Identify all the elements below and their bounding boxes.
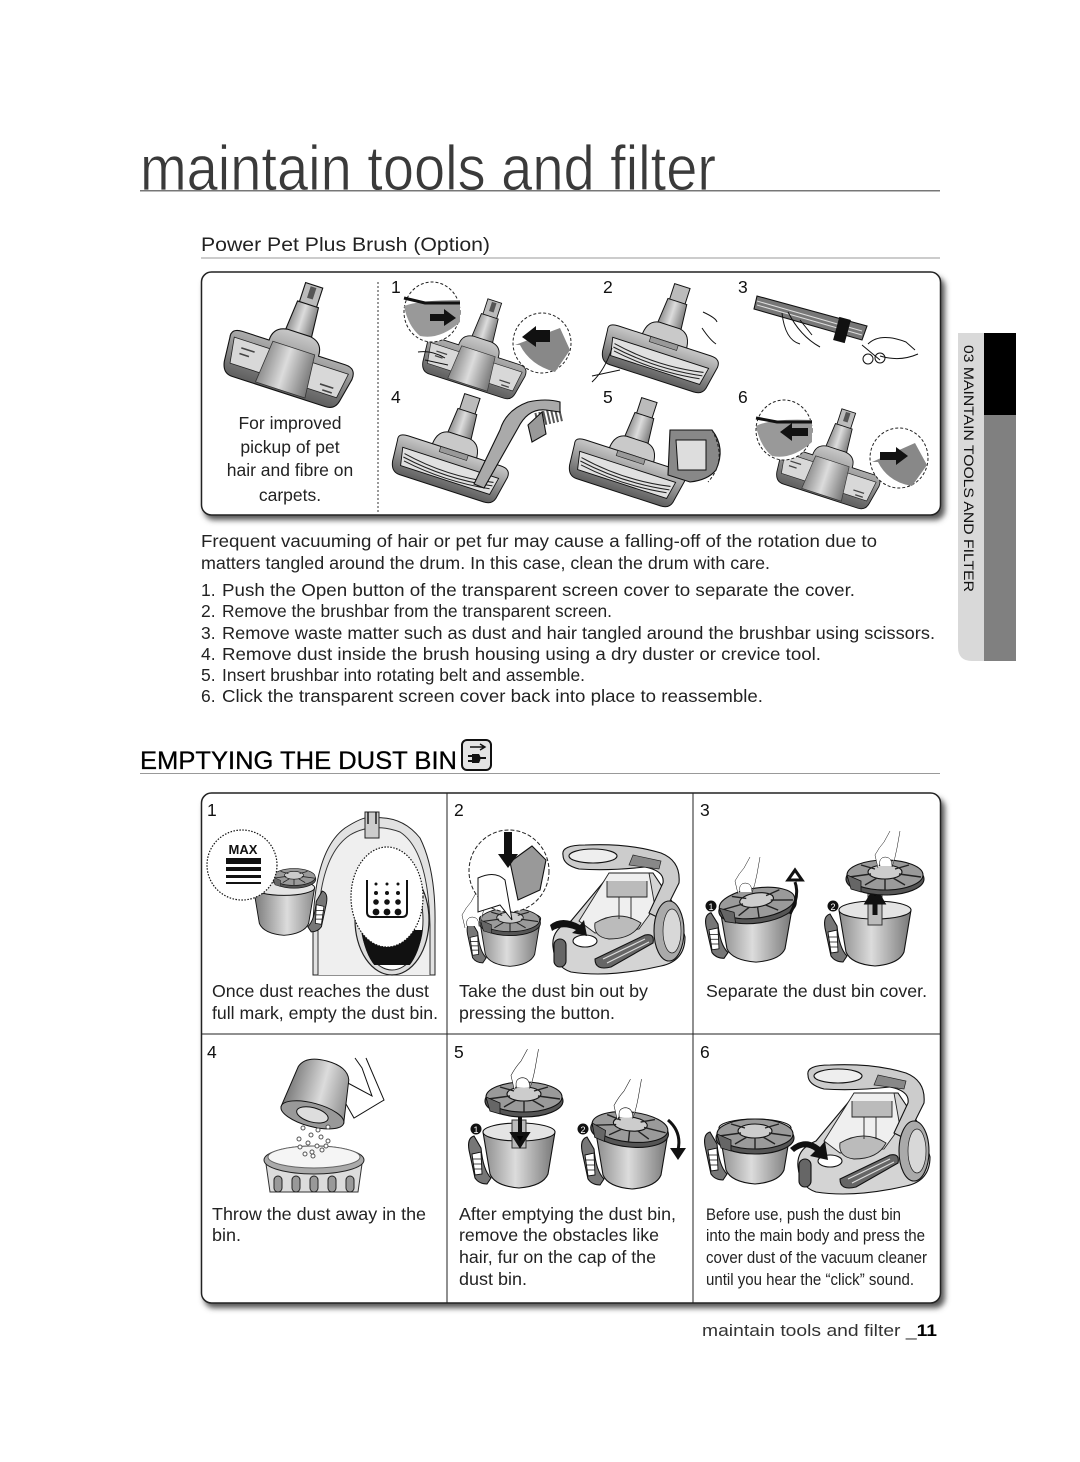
step 1 caption [212, 981, 438, 1023]
step 2: take bin out [454, 800, 685, 974]
panel text: improved pickup: pickup of pet [240, 437, 340, 457]
icon: main brush [218, 265, 376, 412]
step 2 illustration [592, 268, 738, 397]
step 4 caption [212, 1204, 426, 1245]
step 6 caption: until you hear the “click” sound. [706, 1271, 914, 1289]
panel text: improved pickup [227, 413, 353, 505]
step 5: replace cover: 5 [454, 1042, 464, 1062]
numbered instructions: 4. [201, 644, 216, 664]
step 1 illustration: 1 [391, 277, 401, 297]
step 6 caption: into the main body and press the [706, 1227, 925, 1245]
step 2 caption: pressing the button. [459, 1003, 615, 1023]
step 5 caption: hair, fur on the cap of the [459, 1247, 656, 1267]
step 3: separate cover: 3 [700, 800, 710, 820]
numbered instructions: Push the Open button of the transparent screen cover to separate the cover. [222, 580, 855, 600]
numbered instructions: Remove the brushbar from the transparent screen. [222, 601, 612, 621]
step 6 illustration: 6 [738, 387, 748, 407]
step 2: take bin out: 2 [454, 800, 464, 820]
step 5 caption: After emptying the dust bin, [459, 1204, 676, 1224]
step 6 illustration [738, 387, 928, 512]
numbered instructions: 2. [201, 601, 216, 621]
step 4 caption: Throw the dust away in the [212, 1204, 426, 1224]
numbered instructions: 5. [201, 665, 216, 685]
numbered instructions: 3. [201, 623, 216, 643]
step 4 caption: bin. [212, 1225, 241, 1245]
badge: 1 [470, 1124, 482, 1135]
step 5 illustration [564, 382, 720, 511]
step 2 illustration: 2 [603, 277, 613, 297]
heading: power pet plus brush: Power Pet Plus Brush (Option) [201, 235, 490, 256]
badge: 2: 2 [580, 1125, 586, 1135]
step 4 illustration [387, 378, 562, 507]
step 5 illustration: 5 [603, 387, 613, 407]
step 6: reinsert bin [700, 1042, 930, 1194]
badge: 2 [578, 1124, 588, 1135]
step 2 caption: Take the dust bin out by [459, 981, 648, 1001]
step 1: dust full mark: MAX [229, 842, 258, 857]
numbered instructions: Remove waste matter such as dust and hair tangled around the brushbar using scissors. [222, 623, 935, 643]
panel text: improved pickup: For improved [238, 413, 342, 433]
heading: emptying the dust bin [140, 740, 940, 775]
side tab [958, 333, 1016, 661]
step 4: throw dust [207, 1042, 384, 1192]
step 4: throw dust: 4 [207, 1042, 217, 1062]
badge: 2: 2 [830, 902, 836, 912]
intro text: matters tangled around the drum. In this case, clean the drum with care. [201, 553, 770, 573]
heading: emptying the dust bin: EMPTYING THE DUST BIN [140, 747, 457, 775]
step 1 caption: Once dust reaches the dust [212, 981, 429, 1001]
step 3 caption: Separate the dust bin cover. [706, 981, 927, 1001]
step 5 caption: dust bin. [459, 1269, 527, 1289]
step 3: separate cover [700, 800, 924, 966]
step 6 caption: cover dust of the vacuum cleaner [706, 1249, 927, 1267]
badge: 1: 1 [473, 1125, 479, 1135]
step 1: dust full mark: 1 [207, 800, 217, 820]
numbered instructions [201, 580, 935, 706]
numbered instructions: 1. [201, 580, 216, 600]
numbered instructions: Remove dust inside the brush housing using a dry duster or crevice tool. [222, 644, 821, 664]
step 6 caption [706, 1206, 927, 1289]
badge: 2 [828, 900, 838, 912]
numbered instructions: Insert brushbar into rotating belt and assemble. [222, 665, 585, 685]
badge: 1: 1 [708, 902, 714, 912]
step 3 illustration: 3 [738, 277, 748, 297]
step 5 caption: remove the obstacles like [459, 1225, 659, 1245]
side tab label: 03 MAINTAIN TOOLS AND FILTER [961, 345, 976, 592]
panel: dust bin steps [201, 793, 945, 1308]
numbered instructions: 6. [201, 686, 216, 706]
step 2 caption [459, 981, 648, 1023]
step 6 caption: Before use, push the dust bin [706, 1206, 901, 1224]
footer page number: maintain tools and filter _ 11 [702, 1321, 937, 1340]
step 5: replace cover [454, 1042, 686, 1189]
intro text [201, 531, 877, 573]
icon: plug [462, 740, 491, 770]
panel text: improved pickup: hair and fibre on [227, 460, 353, 480]
panel text: improved pickup: carpets. [259, 485, 321, 505]
step 6: reinsert bin: 6 [700, 1042, 710, 1062]
title: maintain tools and filter [140, 134, 716, 204]
numbered instructions: Click the transparent screen cover back into place to reassemble. [222, 686, 763, 706]
step 1: dust full mark [207, 800, 435, 975]
panel: brush steps [202, 265, 945, 520]
intro text: Frequent vacuuming of hair or pet fur may cause a falling-off of the rotation due to [201, 531, 877, 551]
badge: 1 [706, 900, 716, 912]
step 1 caption: full mark, empty the dust bin. [212, 1003, 438, 1023]
step 4 illustration: 4 [391, 387, 401, 407]
step 5 caption [459, 1204, 676, 1289]
step 3 illustration [738, 277, 918, 364]
step 1 illustration [391, 277, 571, 402]
